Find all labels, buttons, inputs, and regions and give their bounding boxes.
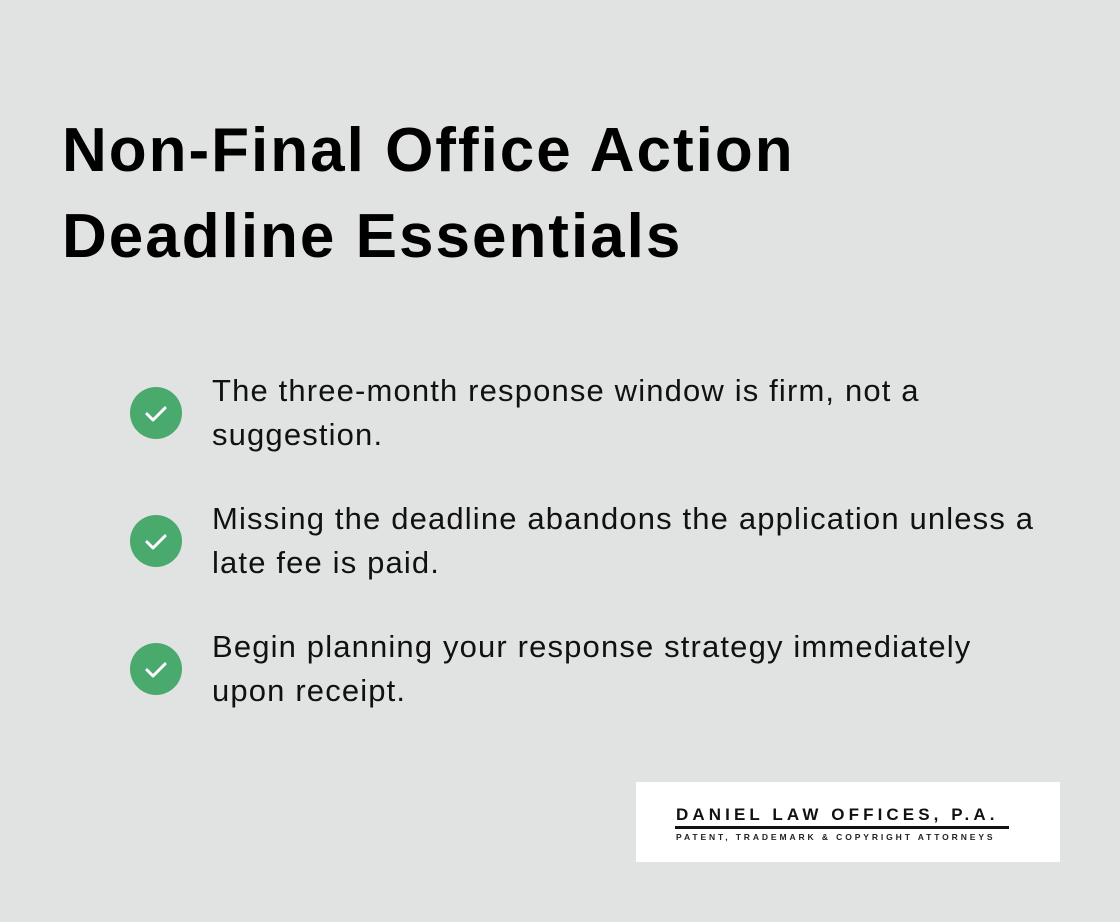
item 2 [130, 501, 1034, 580]
text 1: suggestion. [212, 417, 383, 452]
logo [636, 782, 1060, 862]
icon: check 3 [130, 643, 182, 695]
text 2: late fee is paid. [212, 545, 440, 580]
item 3 [130, 629, 971, 708]
text 3 [212, 629, 971, 708]
text 3: upon receipt. [212, 673, 406, 708]
title: Deadline Essentials [62, 202, 682, 271]
icon: check 2 [130, 515, 182, 567]
item 1 [130, 373, 920, 452]
title: Non-Final Office Action [62, 116, 795, 185]
text 2: Missing the deadline abandons the application unless a [212, 501, 1034, 536]
logo: DANIEL LAW OFFICES, P.A. [676, 805, 999, 824]
title [62, 116, 795, 271]
text 1: The three-month response window is firm, not a [212, 373, 920, 408]
text 2 [212, 501, 1034, 580]
text 3: Begin planning your response strategy immediately [212, 629, 971, 664]
logo: PATENT, TRADEMARK & COPYRIGHT ATTORNEYS [676, 832, 995, 842]
text 1 [212, 373, 920, 452]
icon: check 1 [130, 387, 182, 439]
